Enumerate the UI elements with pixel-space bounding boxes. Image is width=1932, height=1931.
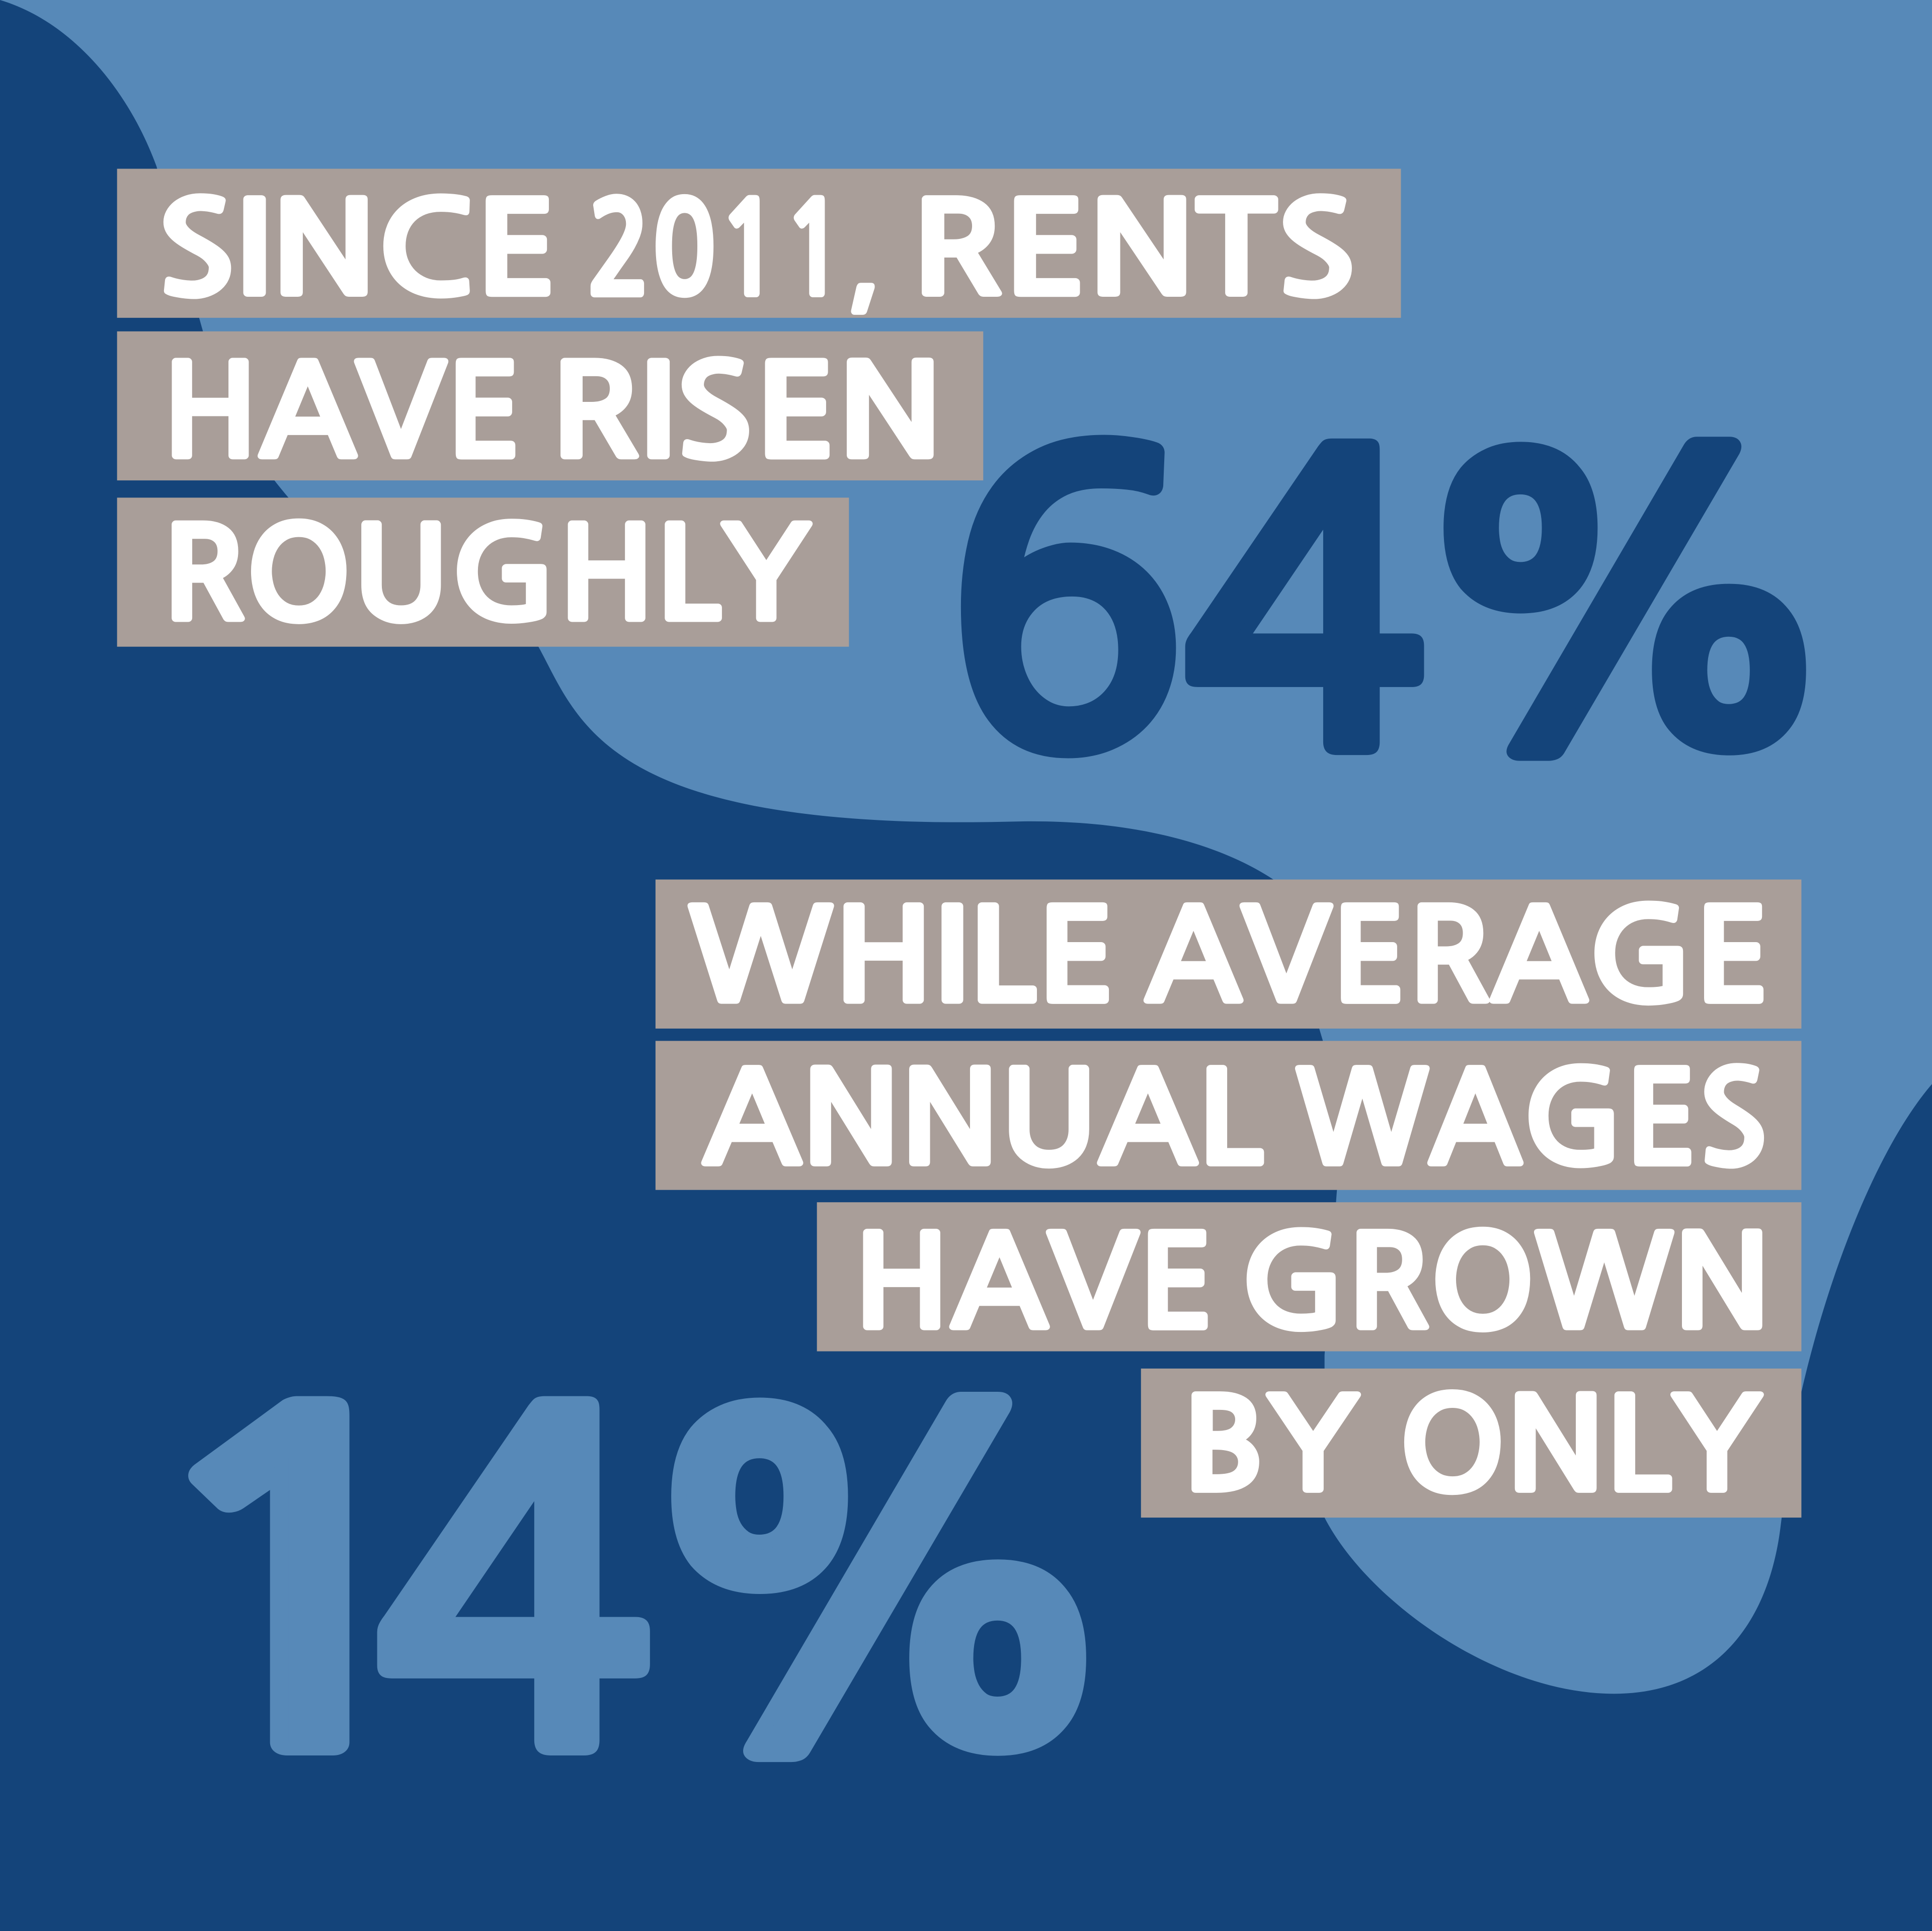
label: since 2011, rents: SINCE xyxy=(156,187,558,313)
big number: 14%: 1 xyxy=(124,1366,469,1815)
label: roughly: ROUGHLY xyxy=(162,512,811,639)
heading: rents statement xyxy=(117,169,1401,647)
label: by only: ONLY xyxy=(1399,1383,1762,1509)
label: since 2011, rents: RENTS xyxy=(911,187,1356,313)
label: have grown xyxy=(817,1202,1801,1352)
label: by only: BY xyxy=(1182,1383,1359,1509)
big number: 14% xyxy=(124,1366,1131,1815)
label: while average xyxy=(656,880,1801,1029)
label: since 2011, rents xyxy=(117,169,1401,318)
big number: 64%: % xyxy=(1405,423,1846,806)
label: while average: WHILE xyxy=(689,894,1116,1021)
big number: 14%: 4 xyxy=(372,1366,656,1815)
big number: 64% xyxy=(941,411,1846,808)
label: by only xyxy=(1141,1369,1801,1518)
big number: 64%: 4 xyxy=(1180,411,1429,808)
label: annual wages: ANNUAL xyxy=(702,1056,1263,1183)
heading: wages statement xyxy=(656,880,1801,1518)
label: have grown: GROWN xyxy=(1240,1220,1770,1347)
label: have risen: RISEN xyxy=(549,350,942,476)
big number: 14%: % xyxy=(627,1376,1131,1813)
label: while average: AVERAGE xyxy=(1145,894,1770,1021)
label: have risen: HAVE xyxy=(162,350,522,476)
label: since 2011, rents: 2011, xyxy=(587,187,880,313)
label: have risen xyxy=(117,331,983,480)
big number: 64%: 6 xyxy=(941,411,1190,808)
label: annual wages xyxy=(656,1041,1801,1190)
label: annual wages: WAGES xyxy=(1296,1056,1768,1183)
label: have grown: HAVE xyxy=(853,1220,1215,1347)
